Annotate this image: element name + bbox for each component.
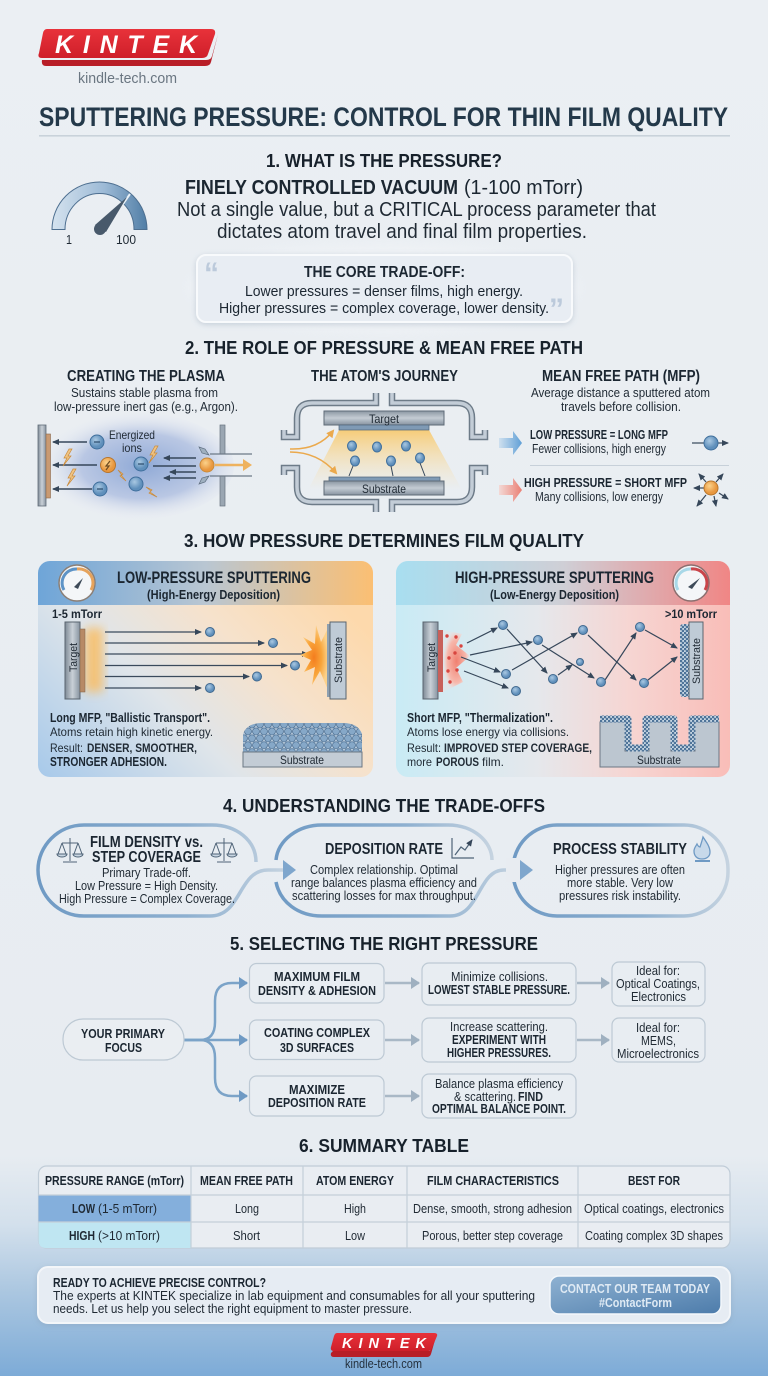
- node: experiment with higher pressures: [422, 1018, 576, 1062]
- call to action panel: needs. Let us help you select the right equipment to master pressure.: [53, 1301, 412, 1316]
- summary table: Dense, smooth, strong adhesion: [413, 1201, 572, 1216]
- logo: KINTEK header: kindle-tech.com: [78, 71, 177, 87]
- text: high-pressure result: [407, 711, 592, 769]
- node: maximum film density: DENSITY & ADHESION: [258, 983, 376, 998]
- panel: process stability: pressures risk instability.: [559, 888, 681, 903]
- node: coating complex surfaces: [250, 1020, 384, 1060]
- node: maximize deposition rate: MAXIMIZE: [289, 1082, 345, 1097]
- icon: high-pressure gauge: [673, 565, 709, 601]
- panel: mean free path: Many collisions, low energy: [535, 489, 663, 504]
- node: ideal for MEMS: Ideal for:: [636, 1020, 680, 1035]
- icon: rate chart: [452, 838, 474, 858]
- summary table: MEAN FREE PATH: [200, 1173, 293, 1188]
- panel: mean free path: LOW PRESSURE = LONG MFP: [530, 427, 668, 442]
- panel: film density vs step coverage: High Pressure = Complex Coverage.: [59, 891, 235, 906]
- node: find optimal balance: FIND: [518, 1089, 543, 1104]
- section 2 heading: 2. THE ROLE OF PRESSURE & MEAN FREE PATH: [185, 337, 583, 358]
- node: lowest stable pressure: LOWEST STABLE PRESSURE.: [428, 982, 570, 997]
- node: coating complex surfaces: COATING COMPLEX: [264, 1025, 370, 1040]
- arrow: high pressure: [499, 478, 522, 502]
- panel: low-pressure sputtering: (High-Energy Deposition): [147, 588, 280, 602]
- summary table: Porous, better step coverage: [422, 1228, 563, 1243]
- node: ideal for coatings: [612, 962, 705, 1006]
- summary table: Low: [345, 1228, 366, 1243]
- intro text: FINELY CONTROLLED VACUUM: [185, 177, 458, 199]
- button: contact: CONTACT OUR TEAM TODAY: [560, 1281, 710, 1296]
- node: coating complex surfaces: 3D SURFACES: [280, 1040, 354, 1055]
- text: high-pressure result: Short MFP, "Thermalization".: [407, 711, 553, 725]
- node: lowest stable pressure: Minimize collisions.: [451, 969, 548, 984]
- logo: KINTEK footer: KINTEK: [342, 1336, 428, 1352]
- node: maximum film density: [250, 964, 384, 1003]
- intro text: [177, 177, 656, 243]
- panel: process stability: more stable. Very low: [567, 875, 674, 890]
- node: experiment with higher pressures: Increase scattering.: [450, 1019, 548, 1034]
- text: low-pressure result: Atoms retain high kinetic energy.: [50, 725, 213, 739]
- panel: the atom's journey chamber: [284, 368, 485, 512]
- panel: deposition rate: scattering losses for max throughput.: [292, 888, 476, 903]
- panel: mean free path: Fewer collisions, high energy: [532, 441, 666, 456]
- callout: core trade-off: THE CORE TRADE-OFF:: [304, 264, 465, 281]
- icon: pressure gauge: [52, 182, 147, 247]
- text: low-pressure result: [50, 711, 213, 769]
- substrate with porous coat: [680, 622, 703, 699]
- panel: high-pressure sputtering: [396, 561, 730, 777]
- panel: mean free path: MEAN FREE PATH (MFP): [542, 368, 700, 385]
- call to action panel: [38, 1267, 730, 1323]
- panel: creating the plasma: ions: [122, 441, 142, 455]
- panel: film density vs step coverage: Low Pressure = High Density.: [75, 878, 218, 893]
- intro text: dictates atom travel and final film properties.: [217, 221, 587, 243]
- target with scattering burst: [423, 622, 470, 699]
- panel: the atom's journey chamber: Target: [369, 412, 400, 426]
- flowchart: selecting pressure: [63, 962, 705, 1118]
- summary table: HIGH: [69, 1228, 95, 1243]
- panel: mean free path: [499, 368, 729, 506]
- text: low-pressure result: DENSER, SMOOTHER,: [87, 741, 197, 755]
- panel: process stability: PROCESS STABILITY: [553, 841, 688, 858]
- panel: process stability: [506, 825, 728, 916]
- text: high-pressure result: more: [407, 755, 432, 769]
- summary table: High: [344, 1201, 366, 1216]
- panel: process stability: Higher pressures are often: [555, 862, 685, 877]
- logo: KINTEK footer: [331, 1333, 437, 1371]
- node: experiment with higher pressures: HIGHER PRESSURES.: [447, 1045, 551, 1060]
- button: contact: [550, 1276, 721, 1314]
- node: ideal for coatings: Electronics: [631, 989, 686, 1004]
- panel: mean free path: Average distance a sputtered atom: [531, 385, 710, 400]
- panel: mean free path: HIGH PRESSURE = SHORT MFP: [524, 475, 687, 490]
- node: ideal for coatings: Optical Coatings,: [616, 976, 700, 991]
- panel: high-pressure sputtering: (Low-Energy Deposition): [490, 588, 619, 602]
- text: high-pressure result: Result:: [407, 741, 441, 755]
- node: find optimal balance: OPTIMAL BALANCE POINT.: [432, 1101, 566, 1116]
- section 6 heading: 6. SUMMARY TABLE: [299, 1135, 469, 1156]
- flow arrows: [184, 983, 609, 1096]
- panel: film density vs step coverage: STEP COVERAGE: [92, 849, 201, 866]
- panel: low-pressure sputtering: 1-5 mTorr: [52, 607, 102, 621]
- summary table: BEST FOR: [628, 1173, 680, 1188]
- node: ideal for MEMS: Microelectronics: [617, 1046, 699, 1061]
- icon: balance scale right: [211, 838, 237, 862]
- node: find optimal balance: Balance plasma efficiency: [435, 1076, 563, 1091]
- summary table: PRESSURE RANGE (mTorr): [45, 1173, 184, 1188]
- summary table: FILM CHARACTERISTICS: [427, 1173, 559, 1188]
- panel: creating the plasma: [30, 368, 252, 520]
- text: high-pressure result: POROUS: [436, 755, 479, 769]
- substrate: [327, 622, 346, 699]
- text: high-pressure result: film.: [482, 755, 504, 769]
- icon: balance scale left: [57, 838, 83, 862]
- impact burst: [300, 625, 328, 690]
- panel: high-pressure sputtering: >10 mTorr: [665, 607, 717, 621]
- node: ideal for MEMS: MEMS,: [641, 1033, 676, 1048]
- summary table: Short: [233, 1228, 260, 1243]
- panel: creating the plasma: low-pressure inert gas (e.g., Argon).: [54, 399, 238, 414]
- panel: deposition rate: range balances plasma efficiency and: [291, 875, 477, 890]
- node: your primary focus: YOUR PRIMARY: [81, 1026, 165, 1041]
- panel: film density vs step coverage: FILM DENSITY vs.: [90, 834, 203, 851]
- icon: pressure gauge: 100: [116, 232, 136, 247]
- dense film on substrate: Substrate: [280, 753, 324, 767]
- node: experiment with higher pressures: EXPERIMENT WITH: [452, 1032, 546, 1047]
- node: find optimal balance: [422, 1074, 576, 1118]
- summary table: (1-5 mTorr): [98, 1201, 157, 1216]
- node: maximum film density: MAXIMUM FILM: [274, 969, 360, 984]
- callout: core trade-off: “: [204, 257, 219, 290]
- panel: deposition rate: Complex relationship. Optimal: [310, 862, 458, 877]
- logo: KINTEK footer: kindle-tech.com: [345, 1356, 422, 1371]
- text: low-pressure result: Result:: [50, 741, 83, 755]
- node: ideal for MEMS: [612, 1018, 705, 1062]
- text: high-pressure result: Atoms lose energy via collisions.: [407, 725, 569, 739]
- button: contact: #ContactForm: [599, 1295, 672, 1310]
- icon: pressure gauge: 1: [66, 232, 72, 247]
- section 4 heading: 4. UNDERSTANDING THE TRADE-OFFS: [223, 795, 545, 816]
- scattering paths: [461, 620, 677, 696]
- summary table: ATOM ENERGY: [316, 1173, 394, 1188]
- panel: mean free path: travels before collision.: [561, 399, 681, 414]
- section 1 heading: 1. WHAT IS THE PRESSURE?: [266, 150, 502, 171]
- text: low-pressure result: Long MFP, "Ballistic Transport".: [50, 711, 210, 725]
- node: your primary focus: FOCUS: [105, 1040, 142, 1055]
- node: find optimal balance: & scattering.: [454, 1089, 516, 1104]
- substrate: Substrate: [333, 637, 345, 683]
- panel: creating the plasma: CREATING THE PLASMA: [67, 368, 225, 385]
- panel: film density vs step coverage: Primary Trade-off.: [102, 865, 191, 880]
- icon: scattering atom: [694, 474, 728, 506]
- panel: low-pressure sputtering: LOW-PRESSURE SPUTTERING: [117, 569, 311, 587]
- target: Target: [68, 643, 80, 672]
- callout: core trade-off: ”: [549, 293, 564, 326]
- substrate with porous coat: Substrate: [691, 638, 703, 684]
- callout: core trade-off: [189, 244, 579, 332]
- coated trench substrate: Substrate: [637, 753, 681, 767]
- summary table: [38, 1166, 730, 1248]
- target with scattering burst: Target: [426, 643, 438, 672]
- node: maximize deposition rate: [250, 1076, 384, 1116]
- icon: long path atom: [692, 436, 728, 450]
- intro text: Not a single value, but a CRITICAL process parameter that: [177, 199, 656, 221]
- panel: deposition rate: [276, 825, 533, 916]
- summary table: (>10 mTorr): [98, 1228, 160, 1243]
- icon: low-pressure gauge: [59, 565, 95, 601]
- summary table: Long: [235, 1201, 259, 1216]
- target: [65, 622, 103, 699]
- node: maximize deposition rate: DEPOSITION RATE: [268, 1095, 366, 1110]
- text: low-pressure result: STRONGER ADHESION.: [50, 755, 167, 769]
- summary table: LOW: [72, 1201, 96, 1216]
- text: high-pressure result: IMPROVED STEP COVERAGE,: [444, 741, 592, 755]
- dense film on substrate: [243, 723, 362, 767]
- panel: the atom's journey chamber: THE ATOM'S JOURNEY: [311, 368, 459, 385]
- panel: low-pressure sputtering: [38, 561, 373, 777]
- panel: deposition rate: DEPOSITION RATE: [325, 841, 443, 858]
- intro text: (1-100 mTorr): [464, 177, 583, 199]
- panel: the atom's journey chamber: Substrate: [362, 482, 406, 496]
- callout: core trade-off: Lower pressures = denser films, high energy.: [245, 283, 523, 300]
- summary table: Coating complex 3D shapes: [585, 1228, 723, 1243]
- node: lowest stable pressure: [422, 963, 576, 1005]
- logo: KINTEK header: [38, 29, 218, 87]
- callout: core trade-off: Higher pressures = complex coverage, lower density.: [219, 300, 549, 317]
- section 5 heading: 5. SELECTING THE RIGHT PRESSURE: [230, 933, 538, 954]
- node: your primary focus: [63, 1019, 184, 1060]
- section 3 heading: 3. HOW PRESSURE DETERMINES FILM QUALITY: [184, 530, 585, 551]
- panel: creating the plasma: Sustains stable plasma from: [71, 385, 218, 400]
- coated trench substrate: [600, 719, 719, 767]
- icon: flame: [694, 837, 710, 861]
- summary table: Optical coatings, electronics: [584, 1201, 724, 1216]
- atom trajectories: [105, 628, 308, 692]
- arrow: low pressure: [499, 431, 522, 455]
- call to action panel: READY TO ACHIEVE PRECISE CONTROL?: [53, 1275, 266, 1290]
- logo: KINTEK header: KINTEK: [55, 31, 199, 59]
- call to action panel: The experts at KINTEK specialize in lab equipment and consumables for all your sputtering: [53, 1288, 535, 1303]
- panel: creating the plasma: Energized: [109, 428, 155, 442]
- node: ideal for coatings: Ideal for:: [636, 963, 680, 978]
- panel: film density vs step coverage: [38, 825, 296, 916]
- panel: high-pressure sputtering: HIGH-PRESSURE SPUTTERING: [455, 569, 654, 587]
